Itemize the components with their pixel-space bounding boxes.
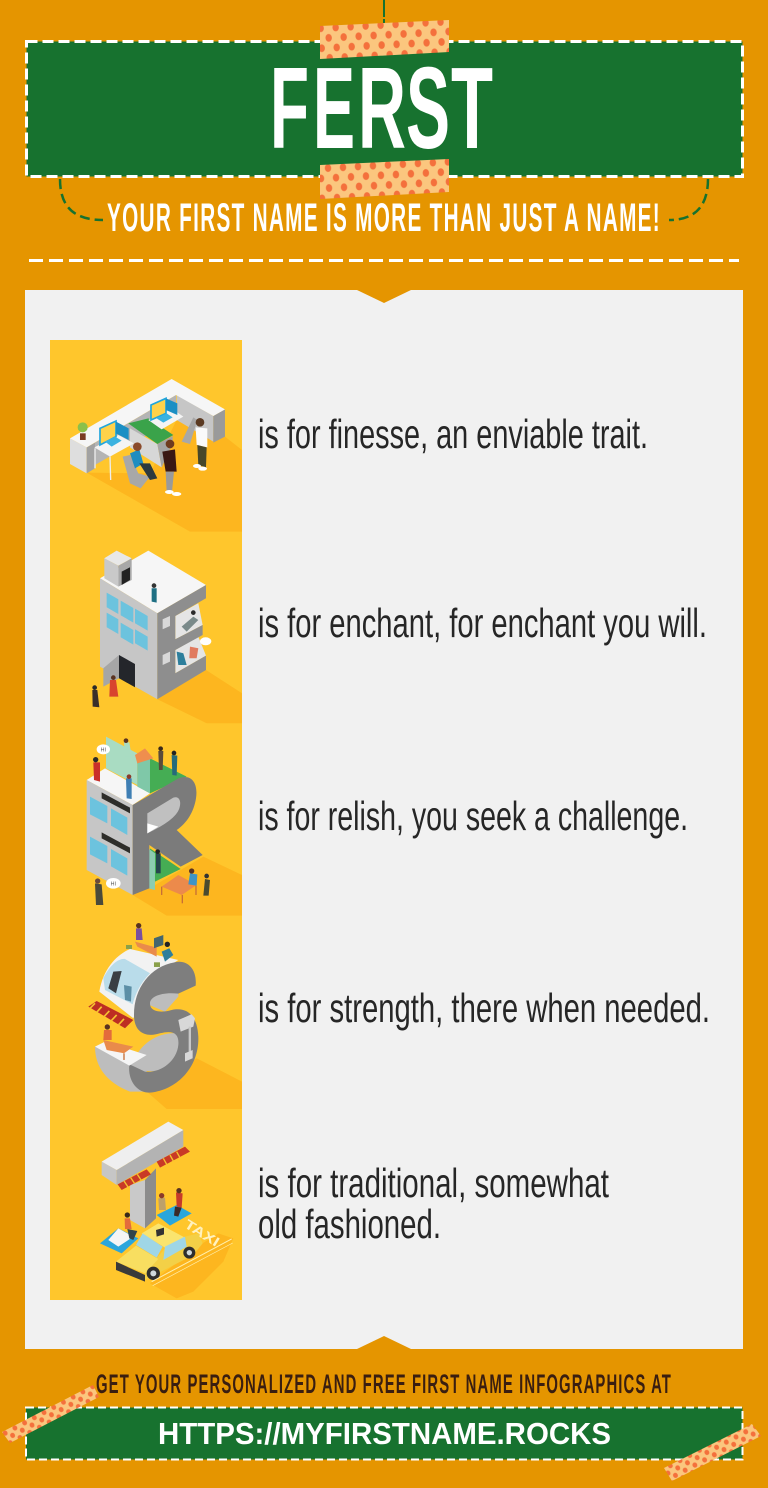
title: FERST: E — [313, 43, 355, 173]
speech bubble: HI bottom: HI — [111, 882, 116, 888]
title: FERST: S — [406, 43, 450, 173]
tape: footer right — [664, 1424, 761, 1481]
speech bubble: HI top: HI — [101, 747, 106, 753]
tape: banner top — [320, 20, 449, 59]
right dashed connector — [669, 179, 708, 220]
footer banner — [26, 1408, 742, 1460]
dashed divider — [29, 259, 739, 262]
road text: TAXI: TAXI — [182, 1216, 222, 1250]
left dashed connector — [60, 179, 103, 220]
bottom notch — [357, 1336, 411, 1349]
title banner — [26, 42, 742, 176]
hanging string — [383, 0, 385, 24]
main paper panel — [25, 290, 743, 1349]
text: T line — [258, 1160, 609, 1247]
title: FERST: R — [358, 43, 406, 173]
tape: banner bottom — [320, 159, 449, 199]
illustration: S shape — [88, 923, 242, 1109]
top notch — [357, 290, 411, 303]
tape: footer left — [2, 1385, 99, 1443]
footer url: HTTPS://MYFIRSTNAME.ROCKS — [158, 1416, 611, 1451]
illustration: R building — [87, 737, 242, 916]
illustration: T taxi — [100, 1122, 233, 1298]
yellow illustration strip — [50, 340, 242, 1300]
text: T line: old fashioned. — [258, 1201, 441, 1247]
text: T line: is for traditional, somewhat — [258, 1160, 609, 1206]
title: FERST: F — [270, 43, 309, 173]
title: FERST: T — [451, 43, 493, 173]
illustration: F office — [70, 379, 242, 532]
title: FERST — [270, 43, 493, 173]
illustration: E building — [92, 551, 242, 723]
